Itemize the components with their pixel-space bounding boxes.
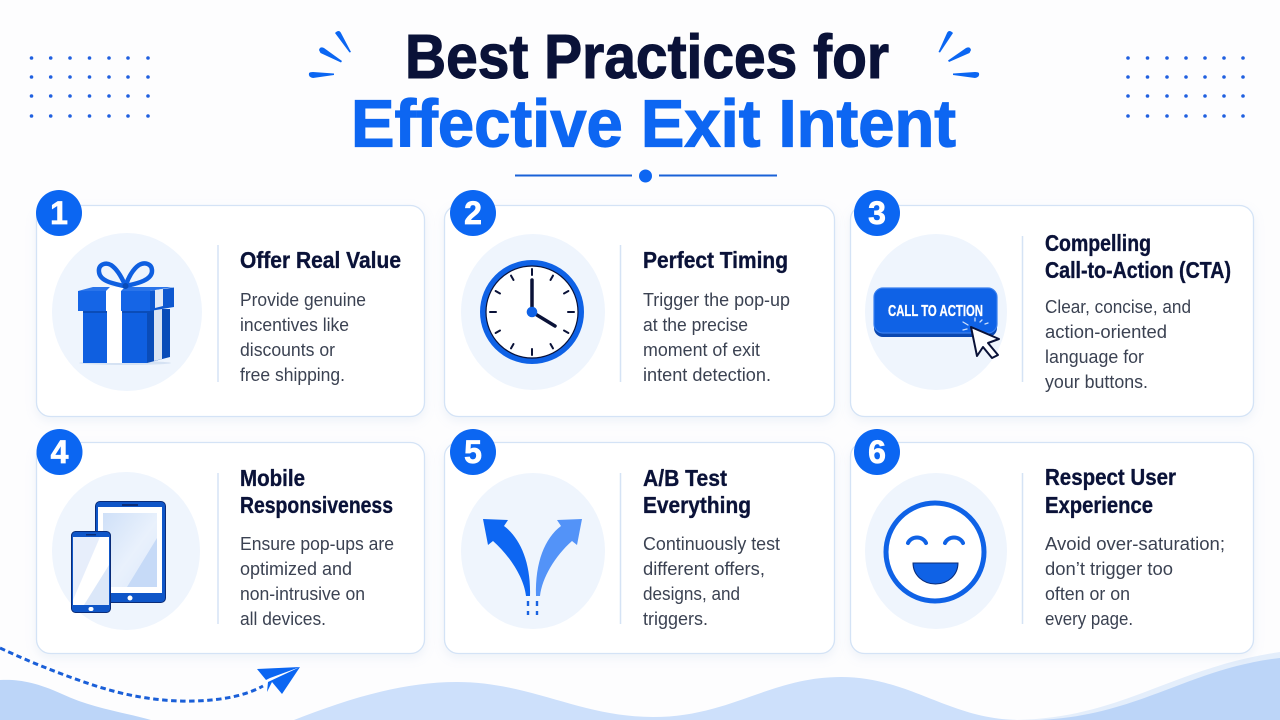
description: all devices. (240, 609, 326, 629)
description: incentives like (240, 315, 349, 335)
panel: respect user experience (850, 429, 1254, 654)
description: often or on (1045, 584, 1130, 604)
description: Ensure pop-ups are (240, 534, 394, 554)
heading: Mobile (240, 465, 305, 491)
icon: call to action button (874, 288, 999, 358)
panel: offer real value (36, 190, 424, 416)
bottom waves (0, 652, 1280, 720)
description: your buttons. (1045, 372, 1148, 392)
panel: perfect timing (444, 190, 834, 416)
description (1045, 297, 1191, 392)
description: intent detection. (643, 365, 771, 385)
description: Provide genuine (240, 290, 366, 310)
description: free shipping. (240, 365, 345, 385)
badge 5: 5 (464, 434, 482, 470)
description (643, 290, 790, 385)
description (240, 290, 366, 385)
description: designs, and (643, 584, 740, 604)
badge 6: 6 (868, 434, 886, 470)
badge 5 (450, 429, 496, 475)
icon: gift box (78, 263, 174, 365)
dashed flight path (0, 648, 263, 701)
heading: Experience (1045, 492, 1153, 518)
description: Trigger the pop-up (643, 290, 790, 310)
title: Effective Exit Intent (351, 86, 956, 162)
description: optimized and (240, 559, 352, 579)
heading: Everything (643, 492, 751, 518)
heading: Respect User (1045, 464, 1176, 490)
icon: split arrows (483, 519, 582, 615)
badge 3: 3 (868, 195, 886, 231)
description: language for (1045, 347, 1144, 367)
badge 4: 4 (51, 434, 69, 470)
heading (1045, 464, 1176, 518)
heading: Call-to-Action (CTA) (1045, 257, 1231, 283)
description (240, 534, 394, 629)
heading (240, 465, 393, 518)
panel: mobile responsiveness (36, 429, 424, 654)
panel: a/b test everything (444, 429, 834, 654)
badge 2: 2 (464, 195, 482, 231)
badge 6 (854, 429, 900, 475)
description: Avoid over-saturation; (1045, 534, 1225, 554)
description: discounts or (240, 340, 335, 360)
icon: paper plane (257, 667, 300, 694)
heading: Perfect Timing (643, 247, 788, 273)
description: Continuously test (643, 534, 780, 554)
description: don’t trigger too (1045, 559, 1173, 579)
title: Best Practices for (405, 23, 889, 92)
description: different offers, (643, 559, 765, 579)
badge 1: 1 (50, 195, 68, 231)
description: action-oriented (1045, 322, 1167, 342)
heading: A/B Test (643, 465, 727, 491)
badge 1 (36, 190, 82, 236)
description: Clear, concise, and (1045, 297, 1191, 317)
heading (1045, 230, 1231, 283)
description: triggers. (643, 609, 708, 629)
heading: Responsiveness (240, 492, 393, 518)
description (1045, 534, 1225, 629)
description (643, 534, 780, 629)
icon: burst right (938, 31, 979, 78)
description: at the precise (643, 315, 748, 335)
icon: call to action button: CALL TO ACTION (888, 303, 983, 320)
heading: Compelling (1045, 230, 1151, 256)
title (351, 23, 956, 162)
title divider (515, 170, 777, 182)
description: non-intrusive on (240, 584, 365, 604)
badge 3 (854, 190, 900, 236)
badge 4 (36, 429, 82, 475)
description: moment of exit (643, 340, 760, 360)
decorative dots right (1126, 56, 1245, 118)
heading (643, 465, 751, 518)
icon: smiley face (886, 503, 984, 601)
icon: clock (480, 260, 584, 364)
heading: Offer Real Value (240, 247, 401, 273)
panel: compelling call-to-action (850, 190, 1254, 416)
icon: tablet and phone (72, 502, 166, 612)
decorative dots left (30, 56, 150, 118)
icon: burst left (309, 31, 351, 78)
description: every page. (1045, 609, 1133, 629)
badge 2 (450, 190, 496, 236)
